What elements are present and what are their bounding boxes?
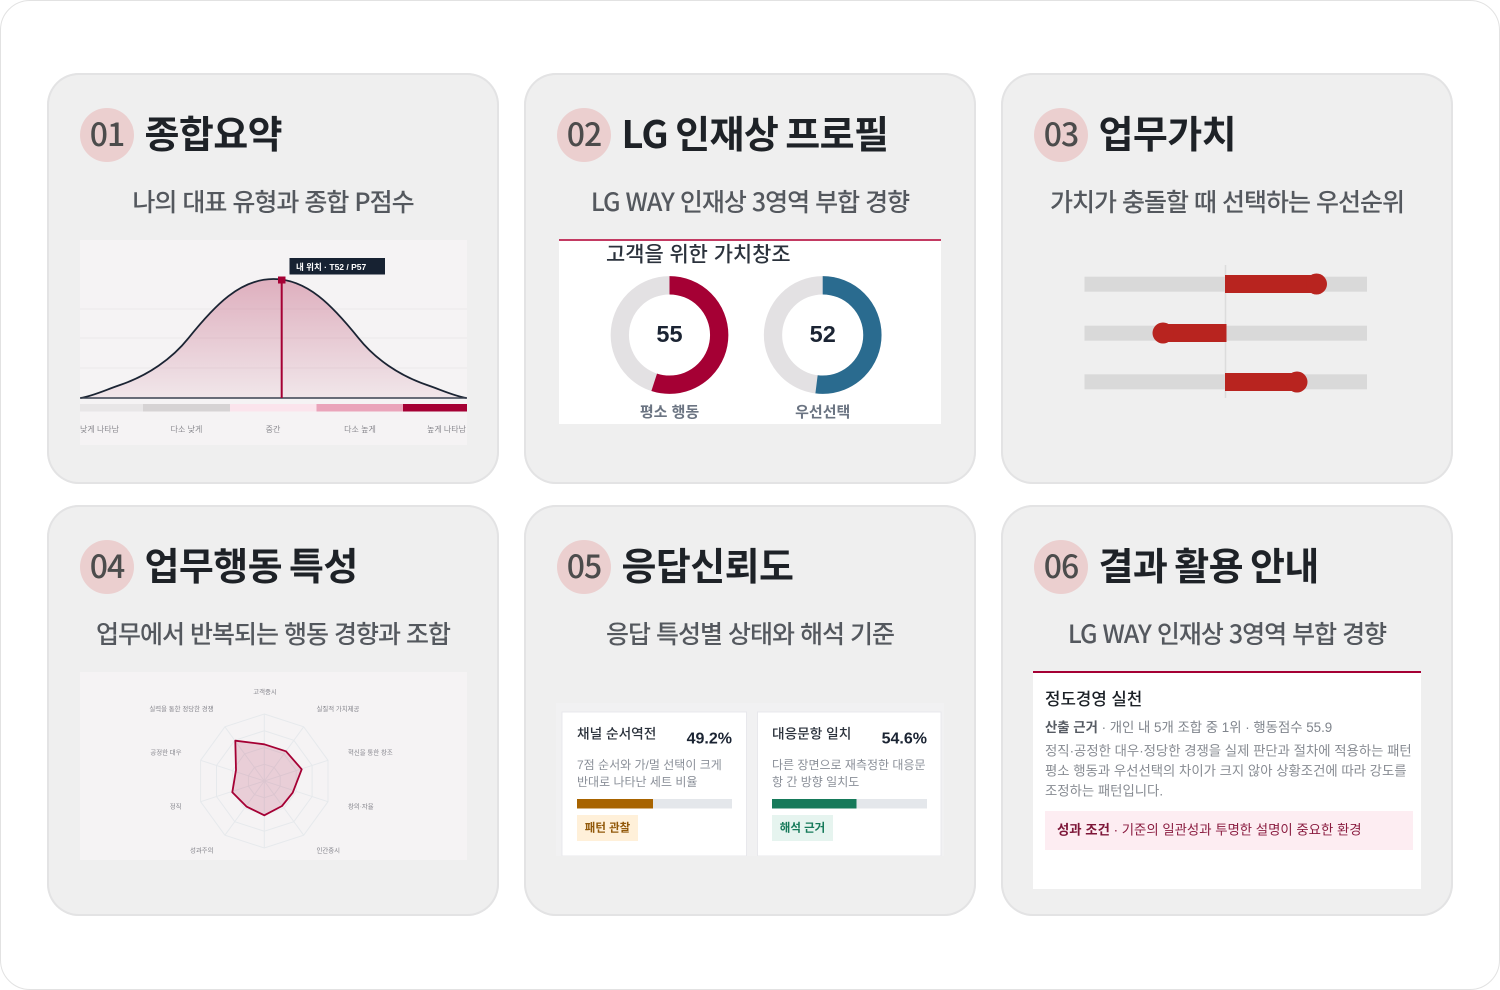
metric card: 대응문항 일치: 해석 근거: [780, 820, 825, 834]
heading: 종합요약: 종합요약: [144, 104, 282, 158]
metric card: 대응문항 일치: 54.6%: [882, 730, 927, 748]
radar axis labels: 고객중시: [253, 687, 277, 696]
position tooltip: 내 위치 · T52 / P57: [296, 262, 367, 272]
description: 조정하는 패턴입니다.: [1045, 784, 1163, 798]
detail title: 정도경영 실천: [1045, 690, 1142, 709]
chart: reliability metric cards: [562, 712, 940, 856]
subheading: summary: 나의 대표 유형과 종합 P점수: [132, 182, 414, 218]
number badge 01: [80, 108, 134, 162]
panel: 04 work behavior: [47, 505, 499, 916]
scale labels: 중간: [266, 424, 281, 434]
radar axis labels: 성과주의: [190, 846, 214, 854]
radar axis labels: 실력을 통한 정당한 경쟁: [149, 704, 214, 713]
value bar 2: [1084, 322, 1367, 344]
subheading: talent profile: LG WAY 인재상 3영역 부합 경향: [591, 182, 909, 218]
number badge 05: [557, 540, 611, 594]
scale labels: 다소 낮게: [171, 424, 202, 434]
number badge 04: 04: [90, 542, 124, 588]
donut: 평소 행동 55: [620, 285, 719, 421]
panel: 06 results guide: [1001, 505, 1453, 916]
subheading: results guide: LG WAY 인재상 3영역 부합 경향: [1068, 614, 1386, 650]
value bar 1: [1084, 274, 1367, 294]
text block: 정도경영 실천 detail: [1033, 671, 1421, 889]
metric card: 대응문항 일치: 다른 장면으로 재측정한 대응문: [772, 758, 926, 772]
radar axis labels: 혁신을 통한 창조: [348, 748, 393, 756]
my position marker: [278, 276, 286, 398]
radar axis labels: [149, 687, 393, 854]
evidence line: 산출 근거 · 개인 내 5개 조합 중 1위 · 행동점수 55.9: [1045, 720, 1332, 735]
metric card: 채널 순서역전: [562, 712, 746, 856]
donut: 평소 행동 55: 55: [656, 321, 683, 347]
number badge 02: 02: [567, 110, 601, 156]
panel: 03 work values: [1001, 73, 1453, 484]
value bar 3: [1084, 372, 1367, 392]
scale labels: 다소 높게: [344, 424, 376, 434]
metric card: 대응문항 일치: 항 간 방향 일치도: [772, 775, 859, 789]
level scale bar: [80, 404, 467, 412]
number badge 02: [557, 108, 611, 162]
description: 평소 행동과 우선선택의 차이가 크지 않아 상황조건에 따라 강도를: [1045, 764, 1407, 778]
chart: bell curve distribution: [80, 258, 467, 434]
metric card: 채널 순서역전: 49.2%: [687, 730, 732, 748]
radar data polygon: [232, 741, 302, 815]
bell curve: [80, 279, 467, 398]
description: 정직·공정한 대우·정당한 경쟁을 실제 판단과 절차에 적용하는 패턴: [1045, 744, 1412, 758]
subheading: reliability: 응답 특성별 상태와 해석 기준: [606, 614, 894, 650]
donut: 우선선택 52: 우선선택: [795, 404, 850, 421]
subheading: work values: 가치가 충돌할 때 선택하는 우선순위: [1050, 182, 1404, 218]
subheading: work behavior: 업무에서 반복되는 행동 경향과 조합: [96, 614, 450, 650]
heading: 응답신뢰도: 응답신뢰도: [622, 536, 793, 590]
scale labels: 높게 나타남: [427, 424, 467, 434]
metric card: 채널 순서역전: 채널 순서역전: [577, 726, 656, 742]
heading: LG 인재상 프로필: LG 인재상 프로필: [622, 104, 888, 158]
number badge 04: [80, 540, 134, 594]
metric card: 채널 순서역전: 반대로 나타난 세트 비율: [577, 775, 697, 789]
heading: 결과 활용 안내: 결과 활용 안내: [1098, 536, 1319, 590]
number badge 03: [1034, 108, 1088, 162]
metric card: 대응문항 일치: [758, 712, 941, 856]
heading: 업무행동 특성: 업무행동 특성: [144, 536, 358, 590]
callout: performance condition: 성과 조건 · 기준의 일관성과 투명한 설명이 중요한 환경: [1057, 822, 1362, 838]
number badge 06: [1034, 540, 1088, 594]
panel: 05 response reliability: [524, 505, 976, 916]
position tooltip: [290, 258, 385, 274]
number badge 01: 01: [90, 110, 124, 156]
radar axis labels: 실질적 가치제공: [316, 704, 360, 713]
panel: 01 summary: [47, 73, 499, 484]
metric card: 대응문항 일치: 대응문항 일치: [772, 726, 851, 742]
radar axis labels: 공정한 대우: [150, 748, 182, 756]
metric card: 채널 순서역전: 7점 순서와 가/멀 선택이 크게: [577, 758, 722, 772]
donut: 평소 행동 55: 평소 행동: [640, 404, 699, 421]
number badge 06: 06: [1044, 542, 1078, 588]
number badge 05: 05: [567, 542, 601, 588]
radar axis labels: 인간중시: [316, 846, 340, 854]
number badge 03: 03: [1044, 110, 1078, 156]
chart: radar: [149, 687, 393, 854]
donut: 우선선택 52: [773, 285, 872, 421]
chart: donut scores: [559, 239, 941, 424]
description: [1045, 744, 1412, 798]
panel: 02 LG talent profile: [524, 73, 976, 484]
chart: diverging value bars: [1084, 265, 1367, 398]
radar axis labels: 창의·자율: [348, 802, 374, 810]
metric card: 채널 순서역전: 패턴 관찰: [585, 820, 631, 834]
donut: 우선선택 52: 52: [810, 321, 836, 347]
chart title: 고객을 위한 가치창조: [606, 244, 791, 266]
callout: performance condition: [1045, 811, 1413, 850]
heading: 업무가치: 업무가치: [1098, 104, 1236, 158]
scale labels: [80, 424, 467, 434]
radar axis labels: 정직: [170, 802, 182, 810]
scale labels: 낮게 나타남: [80, 424, 120, 434]
